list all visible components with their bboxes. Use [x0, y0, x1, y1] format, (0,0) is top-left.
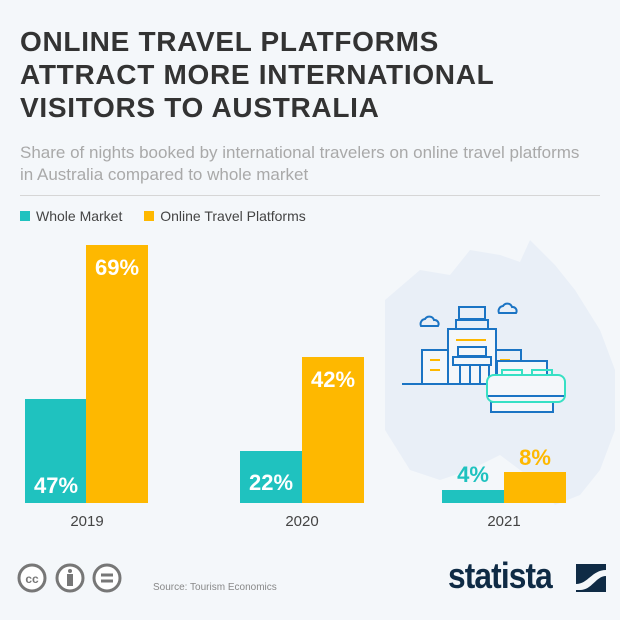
year labels: 2019 [70, 513, 104, 530]
bar chart: 2021 [487, 513, 521, 530]
title [20, 26, 494, 123]
logo: statista: statista [448, 555, 552, 596]
icon: cc licence: cc [25, 572, 39, 586]
title: ATTRACT MORE INTERNATIONAL [20, 59, 494, 90]
bar chart: 4% [457, 462, 489, 487]
subtitle: Share of nights booked by international travelers on online travel platforms in Australia compared to whole market [20, 143, 579, 184]
bar chart [25, 245, 566, 530]
legend: Whole Market Online Travel Platforms [36, 208, 306, 224]
bars 2020 [240, 451, 302, 503]
bar chart: 2020 [285, 513, 319, 530]
logo: statista [448, 555, 606, 596]
title: ONLINE TRAVEL PLATFORMS [20, 26, 439, 57]
title: VISITORS TO AUSTRALIA [20, 92, 380, 123]
source: Source: Tourism Economics [153, 582, 277, 593]
bar chart: 42% [311, 367, 355, 392]
bar chart: 8% [519, 445, 551, 470]
bars 2021 [442, 490, 504, 503]
bar chart: 22% [249, 470, 293, 495]
bar chart: 47% [34, 473, 78, 498]
icon: hotel and bed [402, 302, 566, 413]
icon: cc licence [18, 564, 122, 592]
bars 2019 [25, 399, 86, 503]
bar chart: 69% [95, 255, 139, 280]
